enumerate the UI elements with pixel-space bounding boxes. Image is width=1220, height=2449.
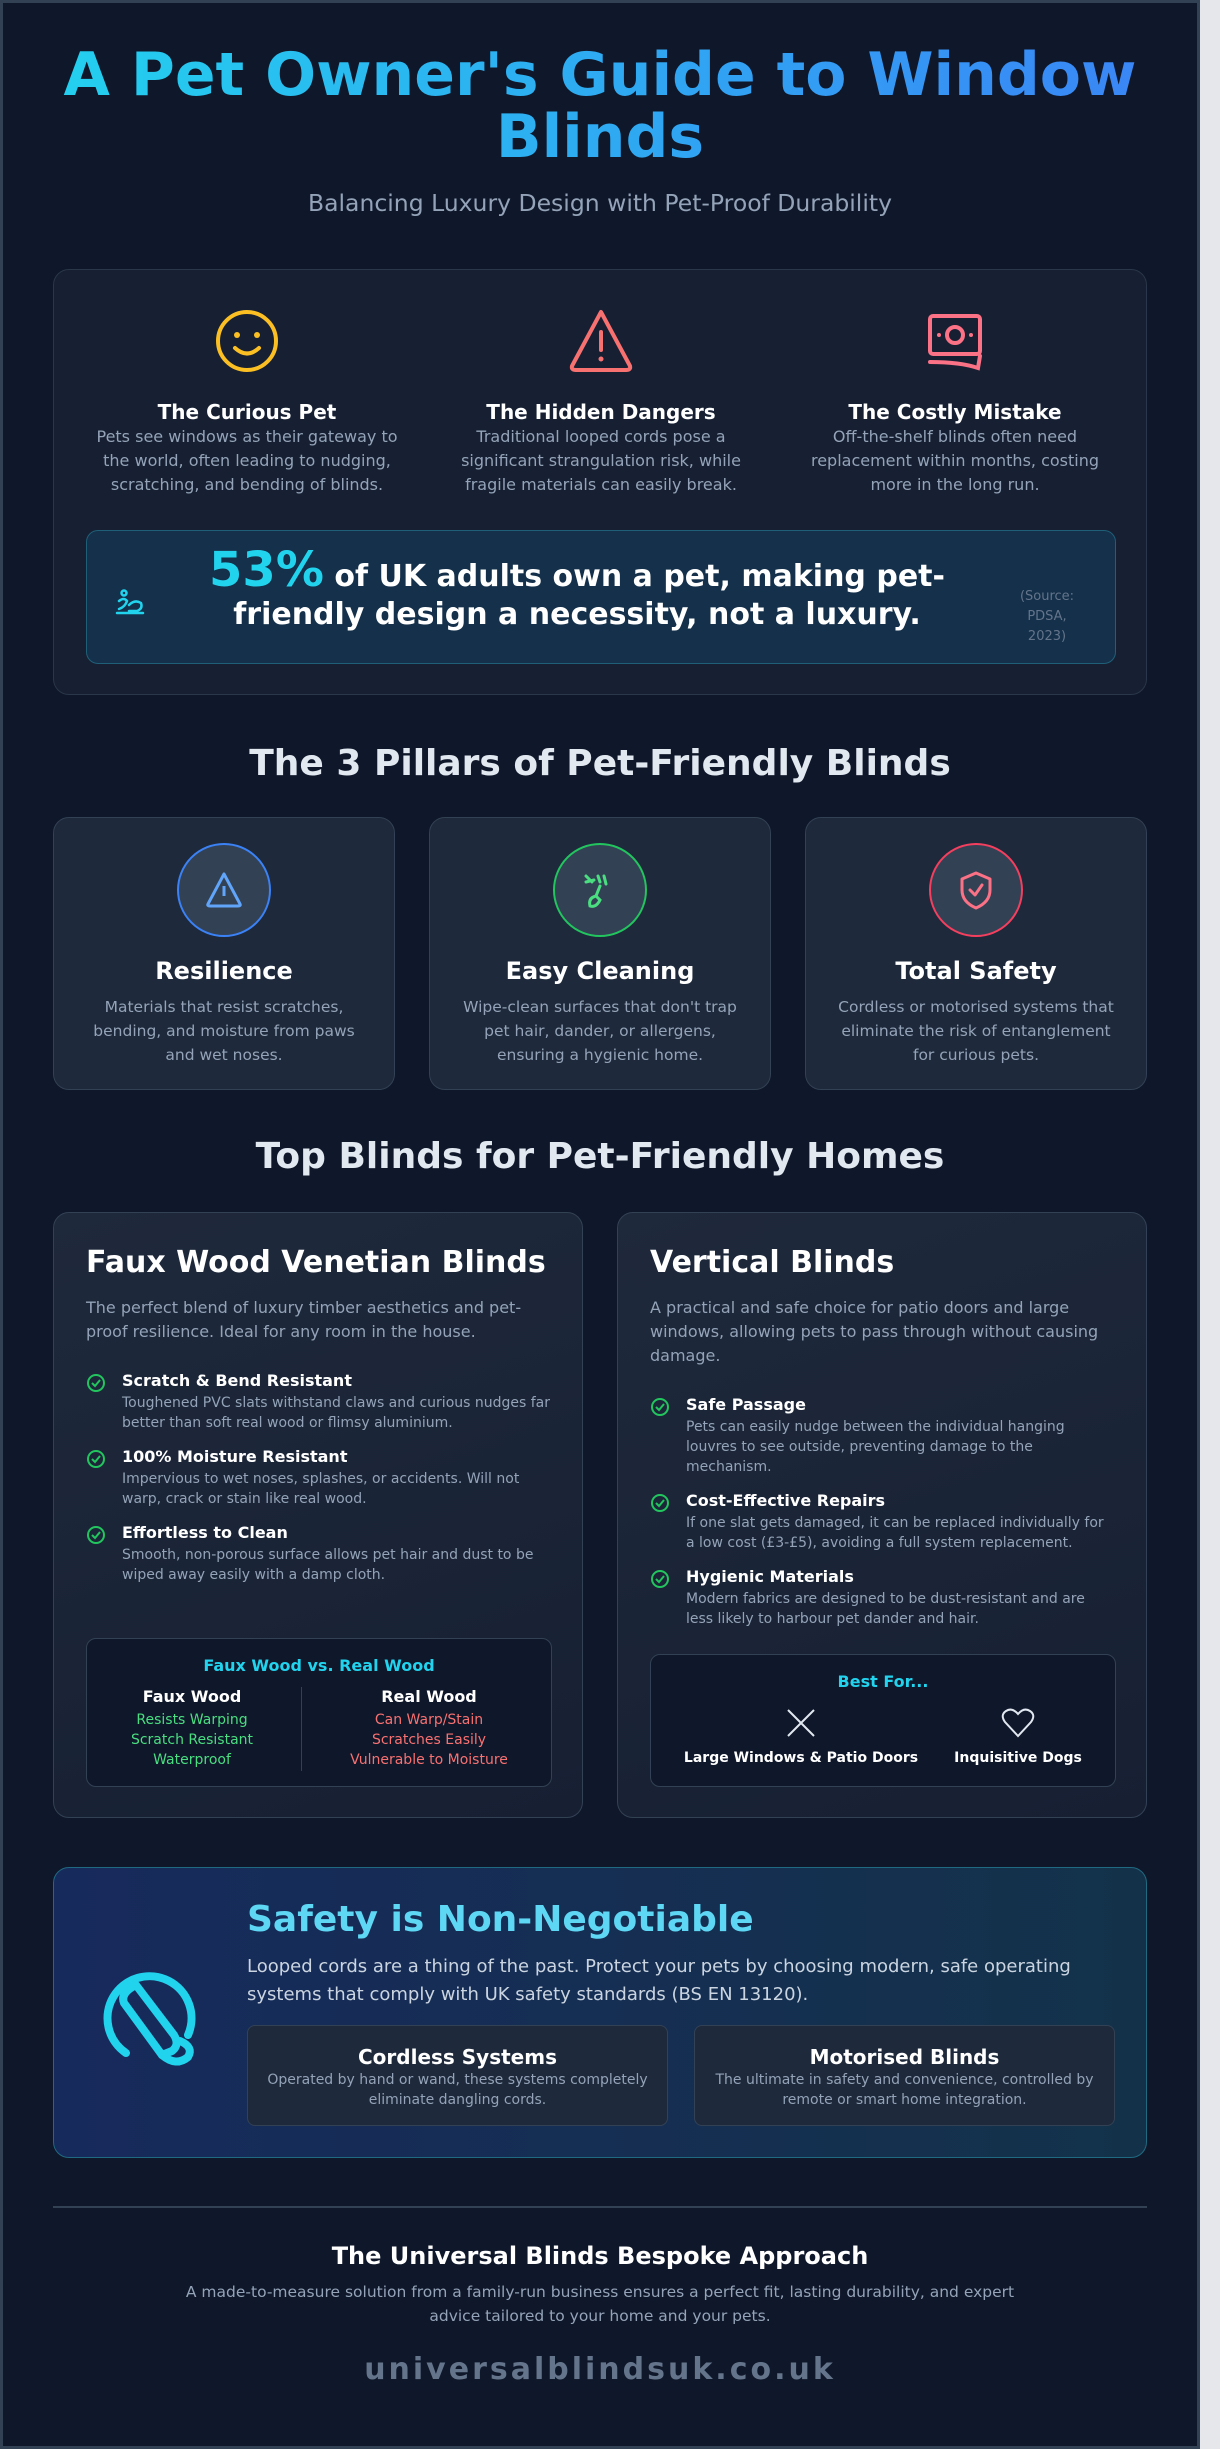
- comparison box: Can Warp/Stain: [375, 1712, 483, 1728]
- problem: costly mistake: Off-the-shelf blinds often need replacement within months, costing more in the long run.: [811, 427, 1099, 494]
- panel: easy cleaning: [429, 817, 771, 1090]
- panel: faux wood: The perfect blend of luxury timber aesthetics and pet-proof resilience. Ideal for any room in the house.: [86, 1298, 521, 1341]
- comparison box: Vulnerable to Moisture: [350, 1752, 508, 1768]
- icon: resilience: [177, 843, 271, 937]
- feature list: Scratch & Bend Resistant: [122, 1371, 352, 1390]
- best for box: Inquisitive Dogs: [954, 1750, 1082, 1766]
- icon: shield: [929, 843, 1023, 937]
- sub-card: cordless: Cordless Systems: [358, 2045, 557, 2069]
- panel: vertical blinds: Vertical Blinds: [650, 1245, 894, 1280]
- title: Blinds: [496, 102, 704, 172]
- feature list: Hygienic Materials: [686, 1567, 854, 1586]
- feature list: Pets can easily nudge between the individual hanging louvres to see outside, preventing damage to the mechanism.: [686, 1419, 1065, 1475]
- problem: costly mistake: [811, 314, 1099, 494]
- source: (Source:: [1020, 589, 1074, 604]
- best for box: Large Windows & Patio Doors: [684, 1750, 918, 1766]
- comparison box: Waterproof: [153, 1752, 231, 1768]
- feature list: Safe Passage: [686, 1395, 806, 1414]
- callout: stat: [86, 530, 1116, 664]
- feature list: [651, 1395, 1104, 1627]
- comparison box: Scratches Easily: [372, 1732, 486, 1748]
- sub-card: cordless: [247, 2025, 668, 2126]
- feature list: [87, 1371, 550, 1583]
- footer: The Universal Blinds Bespoke Approach: [332, 2242, 868, 2270]
- panel: safety: Looped cords are a thing of the past. Protect your pets by choosing modern, safe operating systems that comply with UK safety standards (BS EN 13120).: [247, 1956, 1071, 2005]
- icon: cross: [787, 1709, 815, 1737]
- panel: resilience: Materials that resist scratches, bending, and moisture from paws and wet noses.: [93, 998, 355, 1064]
- feature list: Impervious to wet noses, splashes, or accidents. Will not warp, crack or stain like real wood.: [122, 1471, 519, 1507]
- stat text: 53% of UK adults own a pet, making pet-friendly design a necessity, not a luxury.: [209, 542, 945, 632]
- problem: curious pet: The Curious Pet: [158, 400, 336, 424]
- sub-card: motorised: [694, 2025, 1115, 2126]
- panel: total safety: Total Safety: [895, 957, 1057, 985]
- panel: total safety: Cordless or motorised systems that eliminate the risk of entanglement for curious pets.: [838, 998, 1114, 1064]
- panel: easy cleaning: Wipe-clean surfaces that don't trap pet hair, dander, or allergens, ensuring a hygienic home.: [463, 998, 737, 1064]
- comparison box: Resists Warping: [136, 1712, 248, 1728]
- heading: pillars: The 3 Pillars of Pet-Friendly Blinds: [249, 743, 951, 784]
- problem: costly mistake: The Costly Mistake: [848, 400, 1062, 424]
- feature list: Smooth, non-porous surface allows pet hair and dust to be wiped away easily with a damp cloth.: [122, 1547, 533, 1583]
- icon: pet: [116, 589, 144, 614]
- title: A Pet Owner's Guide to Window: [64, 40, 1136, 110]
- icon: money: [928, 314, 982, 371]
- best for box: Best For...: [838, 1672, 928, 1691]
- title: [0, 44, 1200, 168]
- icon: broom: [553, 843, 647, 937]
- url: universalblindsuk.co.uk: [364, 2352, 836, 2387]
- panel: faux wood: [53, 1212, 583, 1818]
- problem: hidden dangers: The Hidden Dangers: [486, 400, 716, 424]
- panel: faux wood: Faux Wood Venetian Blinds: [86, 1245, 546, 1280]
- comparison box: [86, 1638, 552, 1787]
- feature list: Cost-Effective Repairs: [686, 1491, 885, 1510]
- panel: problems: [53, 269, 1147, 695]
- subtitle: Balancing Luxury Design with Pet-Proof Durability: [308, 189, 892, 217]
- comparison box: Scratch Resistant: [131, 1732, 253, 1748]
- feature list: 100% Moisture Resistant: [122, 1447, 347, 1466]
- problem: hidden dangers: [461, 310, 741, 494]
- panel: resilience: Resilience: [155, 957, 293, 985]
- panel: vertical blinds: A practical and safe choice for patio doors and large windows, allowing pets to pass through without causing damage.: [650, 1298, 1098, 1365]
- comparison box: Real Wood: [381, 1687, 477, 1706]
- comparison box: Faux Wood: [143, 1687, 241, 1706]
- heading: top blinds: Top Blinds for Pet-Friendly Homes: [256, 1136, 944, 1177]
- icon: smiley: [216, 310, 278, 372]
- feature list: Toughened PVC slats withstand claws and curious nudges far better than soft real wood or flimsy aluminium.: [122, 1395, 550, 1431]
- problem: hidden dangers: Traditional looped cords pose a significant strangulation risk, while fragile materials can easily break.: [461, 427, 741, 494]
- icon: heart: [1002, 1708, 1034, 1738]
- panel: total safety: [805, 817, 1147, 1090]
- panel: vertical blinds: [617, 1212, 1147, 1818]
- source: 2023): [1028, 629, 1066, 644]
- best for box: [650, 1654, 1116, 1787]
- icon: warning: [570, 310, 632, 372]
- sub-card: cordless: Operated by hand or wand, these systems completely eliminate dangling cords.: [267, 2072, 648, 2108]
- footer: A made-to-measure solution from a family-run business ensures a perfect fit, lasting durability, and expert advice tailored to your home and your pets.: [186, 2283, 1014, 2325]
- problem: curious pet: [96, 310, 398, 494]
- footer: [186, 2242, 1014, 2387]
- panel: safety: [53, 1867, 1147, 2158]
- feature list: If one slat gets damaged, it can be replaced individually for a low cost (£3-£5), avoiding a full system replacement.: [686, 1515, 1104, 1551]
- comparison box: Faux Wood vs. Real Wood: [203, 1656, 435, 1675]
- sub-card: motorised: Motorised Blinds: [810, 2045, 999, 2069]
- problem: curious pet: Pets see windows as their gateway to the world, often leading to nudging, scratching, and bending of blinds.: [96, 427, 398, 494]
- sub-card: motorised: The ultimate in safety and convenience, controlled by remote or smart home integration.: [715, 2072, 1094, 2108]
- safety heading: Safety is Non-Negotiable: [247, 1899, 754, 1940]
- feature list: Effortless to Clean: [122, 1523, 288, 1542]
- source: [1020, 589, 1074, 644]
- panel: easy cleaning: Easy Cleaning: [506, 957, 694, 985]
- icon: cordless: [104, 1972, 196, 2066]
- panel: resilience: [53, 817, 395, 1090]
- feature list: Modern fabrics are designed to be dust-resistant and are less likely to harbour pet dander and hair.: [686, 1591, 1085, 1627]
- source: PDSA,: [1027, 609, 1067, 624]
